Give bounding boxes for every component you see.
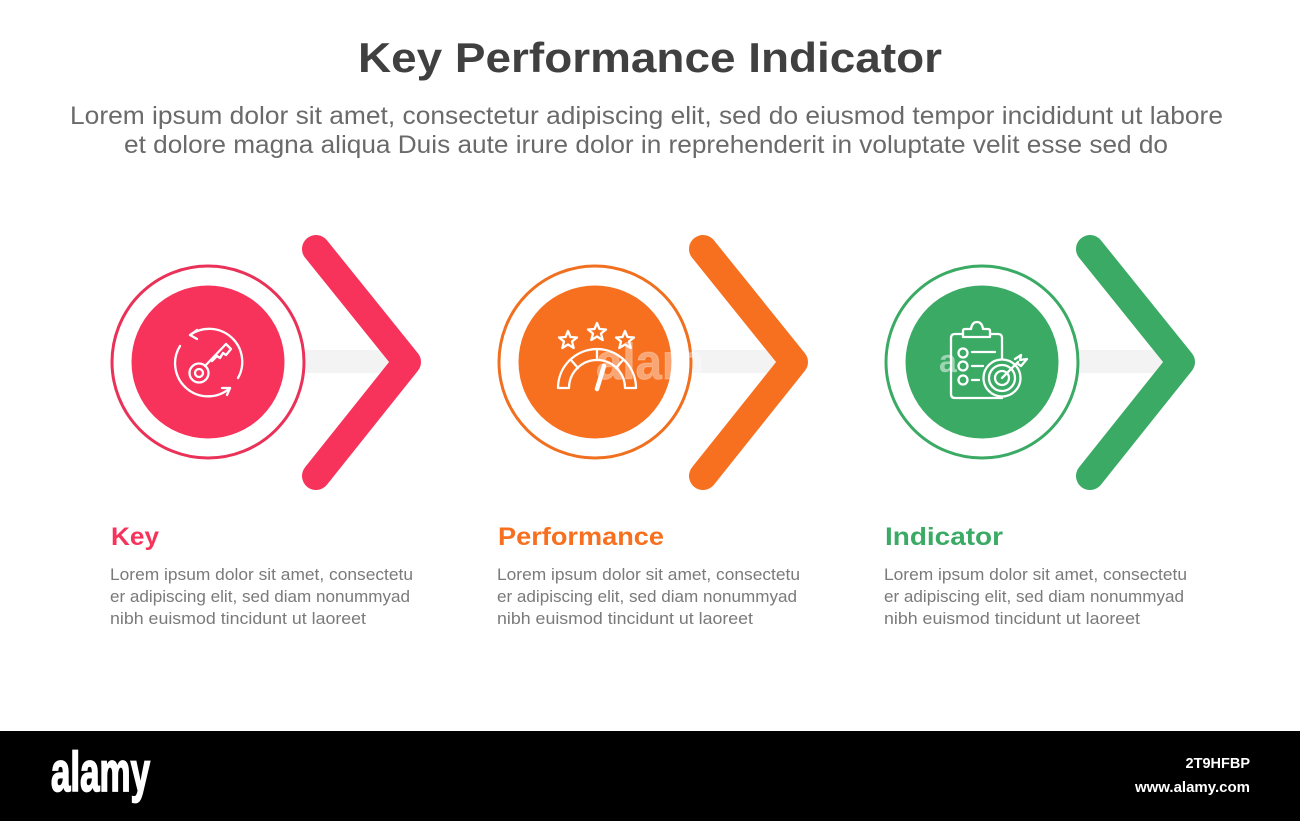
outer ring: key: [112, 266, 304, 458]
heading: performance: Performance: [498, 523, 664, 551]
body text: performance: er adipiscing elit, sed diam nonummyad: [497, 587, 797, 606]
body text: performance: nibh euismod tincidunt ut laoreet: [497, 609, 753, 628]
watermark: a: [939, 343, 957, 379]
icon: key with rotating arrows: [175, 329, 242, 396]
inner disc: indicator: [906, 286, 1058, 438]
title: Key Performance Indicator: [358, 34, 942, 81]
chevron arrow: key: [316, 249, 407, 476]
watermark: alam: [596, 334, 704, 390]
outer ring: indicator: [886, 266, 1078, 458]
footer logo: alamy: [51, 740, 150, 803]
body text: performance: [497, 565, 800, 628]
heading: indicator: Indicator: [885, 523, 1003, 551]
chevron arrow: performance: [703, 249, 794, 476]
body text: performance: Lorem ipsum dolor sit amet, consectetu: [497, 565, 800, 584]
connector bar: performance: [693, 350, 778, 373]
website: www.alamy.com: [1134, 779, 1250, 796]
image id: 2T9HFBP: [1186, 756, 1250, 772]
inner disc: key: [132, 286, 284, 438]
intro paragraph: Lorem ipsum dolor sit amet, consectetur adipiscing elit, sed do eiusmod tempor incididunt ut labore: [70, 102, 1223, 130]
panel: indicator: [884, 249, 1187, 628]
body text: indicator: er adipiscing elit, sed diam nonummyad: [884, 587, 1184, 606]
connector bar: key: [306, 350, 391, 373]
inner disc: performance: [518, 286, 672, 438]
body text: indicator: [884, 565, 1187, 628]
intro paragraph: [70, 102, 1223, 159]
body text: indicator: nibh euismod tincidunt ut laoreet: [884, 609, 1140, 628]
body text: indicator: Lorem ipsum dolor sit amet, consectetu: [884, 565, 1187, 584]
heading: key: Key: [111, 523, 159, 551]
connector bar: indicator: [1080, 350, 1165, 373]
footer bar: [0, 731, 1300, 821]
panel: performance: [497, 249, 800, 628]
body text: key: Lorem ipsum dolor sit amet, consectetu: [110, 565, 413, 584]
body text: key: nibh euismod tincidunt ut laoreet: [110, 609, 366, 628]
panel: key: [110, 249, 413, 628]
chevron arrow: indicator: [1090, 249, 1181, 476]
icon: speedometer with stars: [558, 323, 636, 389]
outer ring: performance: [499, 266, 691, 458]
body text: key: [110, 565, 413, 628]
intro paragraph: et dolore magna aliqua Duis aute irure dolor in reprehenderit in voluptate velit esse sed do: [124, 131, 1168, 159]
body text: key: er adipiscing elit, sed diam nonummyad: [110, 587, 410, 606]
icon: clipboard with target: [951, 322, 1027, 398]
